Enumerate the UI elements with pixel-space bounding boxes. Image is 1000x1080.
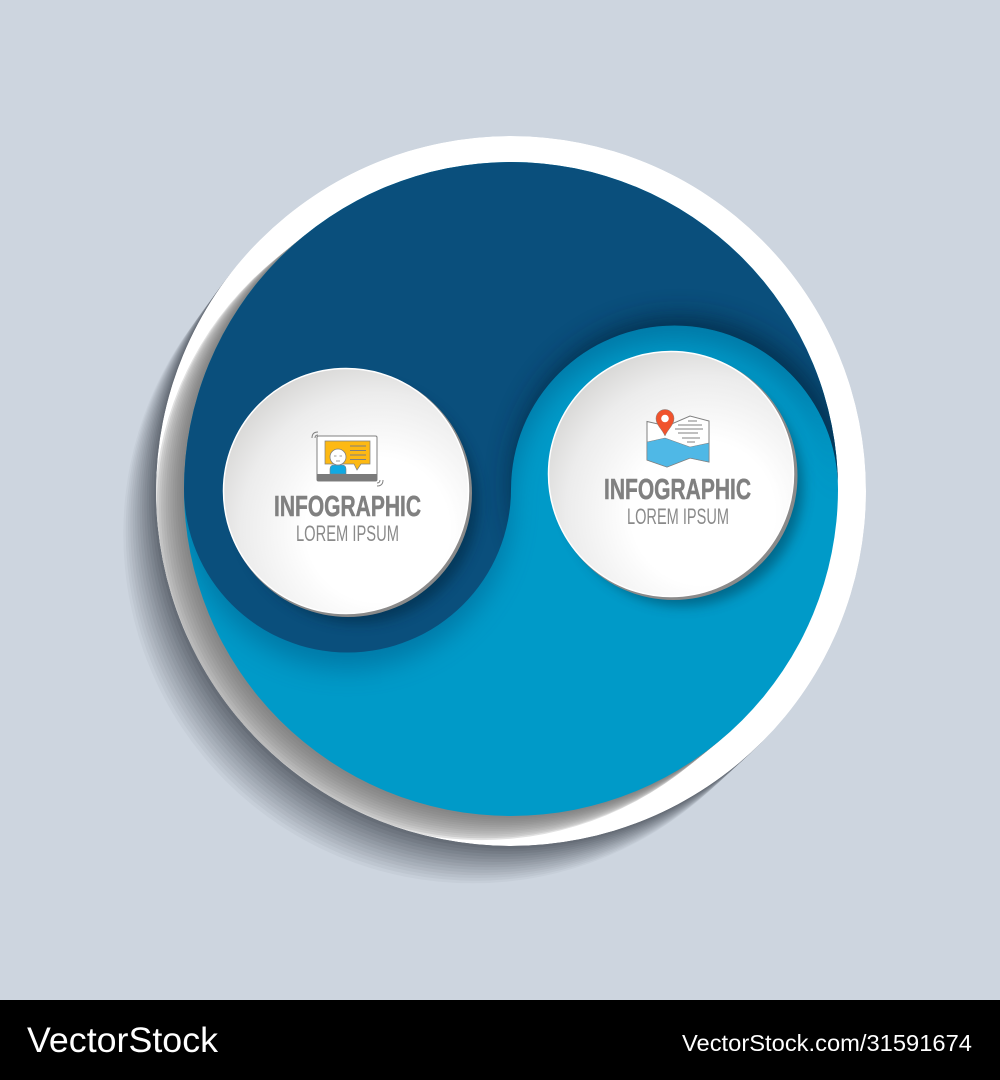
icon: map with location pin [647, 410, 709, 467]
shadow of light shape on dark blue [500, 305, 838, 529]
shadow of dark shape on light blue [184, 326, 828, 677]
light blue lower shape [184, 162, 838, 816]
footer bar [0, 1000, 1000, 1080]
icon: location pin [656, 410, 674, 436]
main circle: yin-yang blue shapes [184, 162, 846, 816]
outer white ring [154, 136, 866, 846]
right plate [548, 352, 803, 606]
footer brand: VectorStock [27, 1021, 219, 1060]
subheading: right plate: LOREM IPSUM [627, 504, 729, 529]
subheading: left plate: LOREM IPSUM [296, 521, 399, 546]
icon: video chat screen [312, 432, 383, 486]
heading: left plate: INFOGRAPHIC [274, 491, 421, 523]
footer image id: VectorStock.com/31591674 [682, 1030, 972, 1056]
heading: right plate: INFOGRAPHIC [604, 474, 751, 506]
dark blue upper shape [184, 162, 838, 653]
left plate [224, 368, 478, 623]
outer disc cast shadow [123, 140, 863, 883]
